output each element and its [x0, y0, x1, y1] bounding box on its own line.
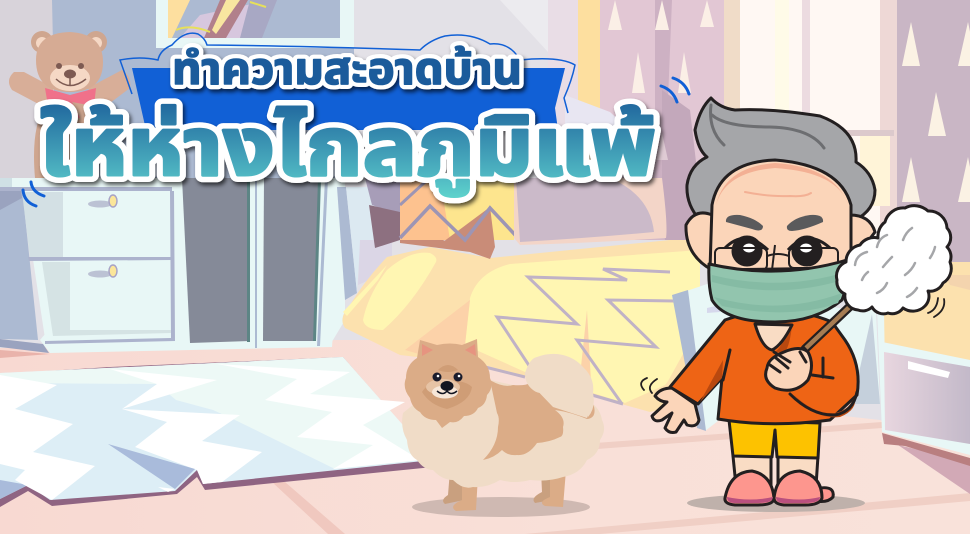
mask — [709, 260, 847, 322]
glasses — [715, 245, 838, 270]
title line 1: ทำความสะอาดบ้าน — [172, 45, 522, 94]
dog body — [402, 380, 604, 488]
dog legs — [443, 470, 566, 511]
banner — [120, 33, 575, 130]
title line 2: ให้ห่างไกลภูมิแพ้ — [40, 102, 656, 197]
teddy bear — [9, 31, 130, 178]
shelf unit — [156, 0, 354, 178]
curtain: left pink — [578, 0, 740, 240]
nightstand — [0, 178, 180, 353]
shorts — [729, 420, 820, 458]
legs — [733, 456, 818, 486]
title line 1: ทำความสะอาดบ้าน — [172, 45, 522, 94]
wardrobe — [40, 178, 392, 353]
title line 2: ให้ห่างไกลภูมิแพ้ — [40, 102, 656, 197]
dog body patch — [483, 380, 595, 460]
motion marks: hand and duster — [641, 298, 944, 393]
bedside cabinet right — [875, 262, 970, 466]
floor — [0, 340, 970, 534]
bed — [342, 178, 700, 412]
face — [710, 160, 851, 270]
holding hand — [766, 348, 812, 390]
slippers — [725, 471, 833, 505]
character: grandfather with duster — [641, 98, 951, 512]
dog head — [405, 339, 491, 428]
left hand — [652, 388, 699, 432]
duster stick — [805, 295, 862, 349]
dog tail — [525, 354, 594, 417]
dog shadow — [412, 497, 590, 517]
neck — [775, 325, 792, 352]
body — [670, 310, 858, 424]
eyebrows — [726, 215, 763, 230]
curtain: right mauve — [897, 0, 970, 270]
eyes — [725, 236, 830, 266]
pillow: mauve — [514, 178, 666, 245]
ears — [686, 213, 875, 270]
hair — [687, 98, 875, 220]
pillow: orange — [365, 178, 518, 259]
box behind character — [672, 284, 880, 431]
motion marks: blue — [23, 78, 689, 206]
character shadow — [687, 494, 865, 512]
duster head — [836, 206, 951, 314]
window — [740, 0, 898, 240]
rug — [0, 357, 433, 507]
dog — [402, 339, 604, 517]
